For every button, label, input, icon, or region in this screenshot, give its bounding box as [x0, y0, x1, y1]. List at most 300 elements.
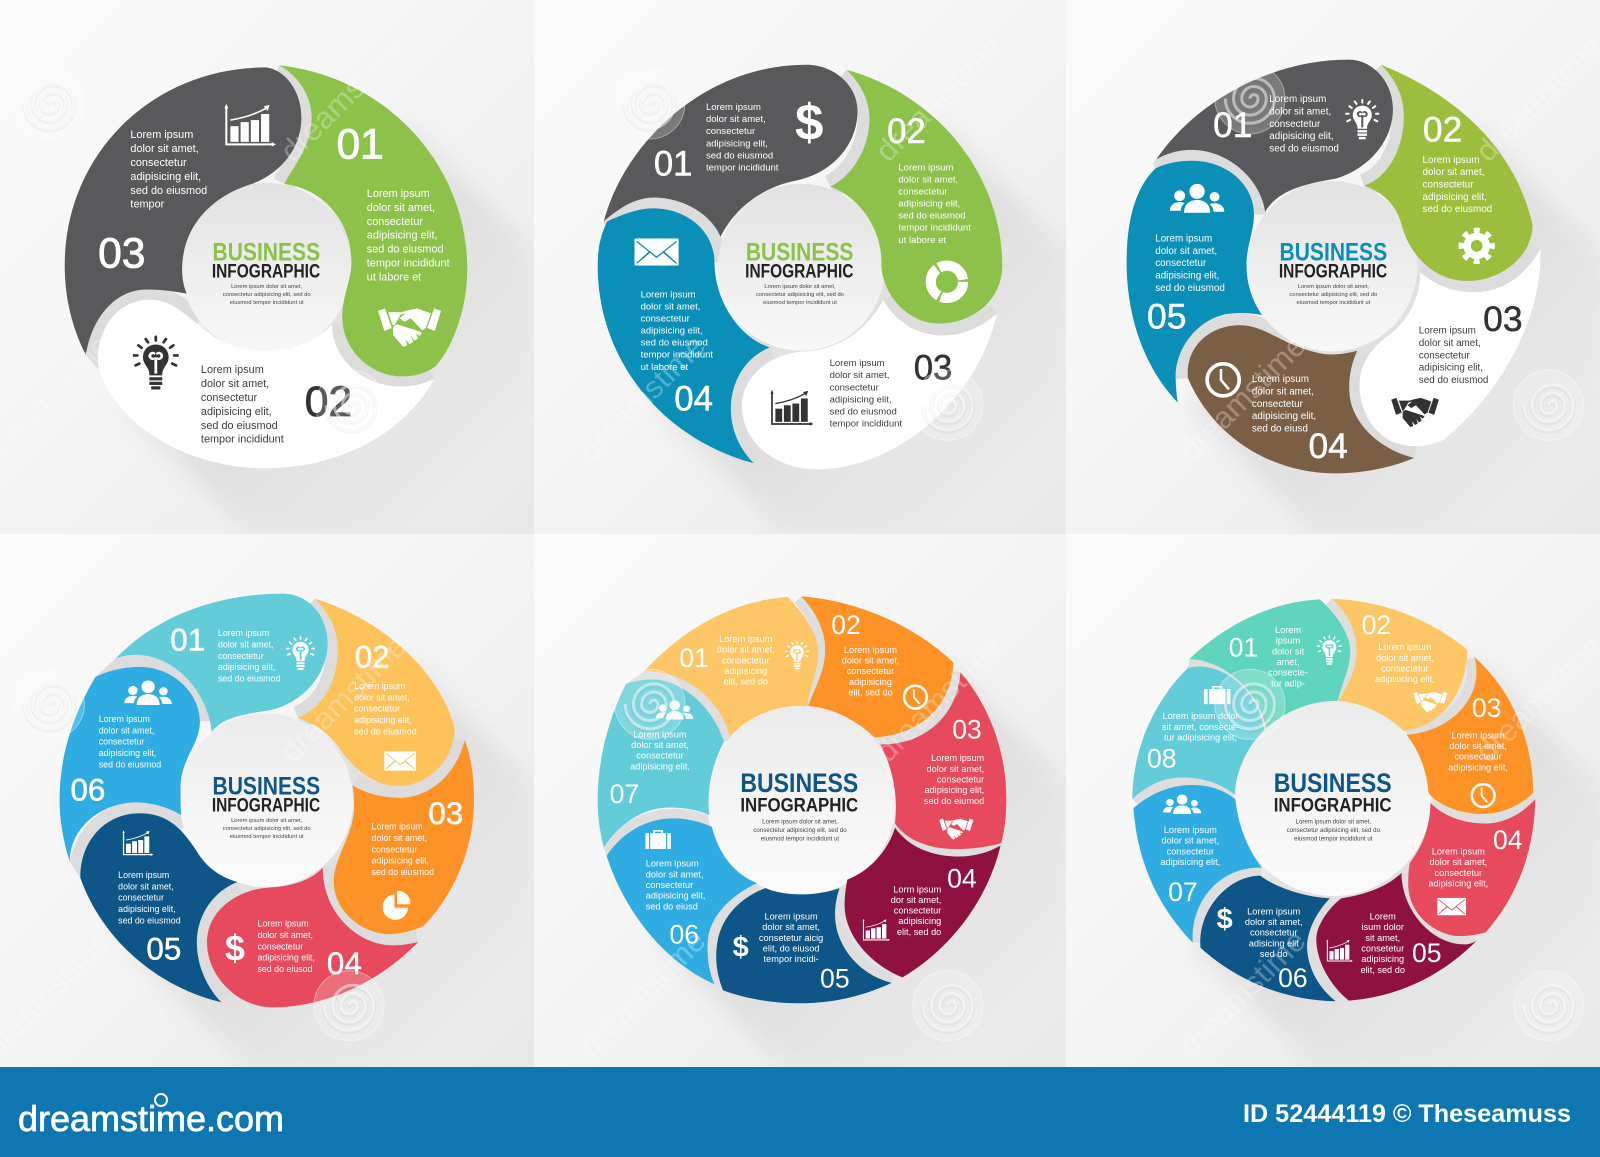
- text block: tempor incididunt: [830, 419, 902, 430]
- center circle: [181, 183, 351, 353]
- icon: clock: [904, 686, 927, 709]
- number 06: 06: [1278, 963, 1308, 993]
- text block: sed do: [1260, 949, 1288, 959]
- number 02: 02: [1362, 610, 1391, 640]
- center title: BUSINESS: [1274, 768, 1392, 798]
- text block: dolor sit amet,: [257, 930, 313, 940]
- center title: Lorem ipsum dolor sit amet,: [1296, 818, 1371, 825]
- text block: tempor: [130, 199, 165, 211]
- panel: 7-step diagram: [573, 596, 1066, 1067]
- text block: elit, sed do: [897, 927, 941, 937]
- text block: consectetur: [1419, 350, 1471, 361]
- segment 07: cyan: [598, 679, 724, 847]
- center circle: [707, 706, 896, 895]
- text block: dolor sit amet,: [372, 833, 427, 843]
- text block: tempor incididunt: [898, 223, 971, 234]
- text block: isum dolor: [1362, 922, 1404, 932]
- icon: dollar: $: [795, 94, 823, 151]
- text block: adipisicing elit,: [218, 662, 275, 672]
- watermark: [0, 29, 413, 468]
- text block: dolor sit amet,: [201, 378, 269, 390]
- text block: adipisicing elit,: [1419, 363, 1483, 374]
- segment 01: green: [279, 65, 467, 376]
- number 06: 06: [670, 920, 699, 950]
- number 02: 02: [305, 378, 352, 426]
- text block: tempor incididunt: [706, 162, 779, 173]
- text block: dolor sit amet,: [1161, 836, 1219, 846]
- number 04: 04: [674, 380, 713, 418]
- text block: adipisicing elit,: [1269, 131, 1333, 142]
- segment 05: navy: [80, 813, 237, 1002]
- watermark: dreamstime: [869, 629, 1009, 769]
- text block: sed do eiusd: [1252, 423, 1308, 434]
- segment 03: white: [742, 300, 997, 469]
- center title: [212, 240, 320, 306]
- text block: dolor sit amet,: [830, 370, 889, 381]
- center title: INFOGRAPHIC: [212, 796, 320, 817]
- number 01: 01: [170, 622, 205, 657]
- text block: tempor incididunt: [641, 350, 713, 361]
- text block: ut labore et: [898, 235, 946, 246]
- text block: sed do eiusmod: [1155, 283, 1225, 294]
- icon: bulb: [134, 337, 178, 389]
- icon: envelope: [1437, 898, 1466, 915]
- center title: eiusmod tempor incididunt ut: [230, 834, 304, 840]
- icon: chart: [1326, 939, 1353, 962]
- text block: tur adip-: [1271, 678, 1305, 688]
- text block: consectetur: [218, 651, 264, 661]
- segment 01: cyan: [116, 594, 328, 732]
- text block: Lorem ipsum: [201, 364, 264, 376]
- text block: sed do eiusd: [646, 901, 698, 911]
- text block: adipisicing elit,: [630, 761, 690, 771]
- text block: dolor sit: [1272, 646, 1305, 656]
- icon: envelope: [384, 751, 416, 771]
- text block: tempor incididunt: [201, 434, 284, 446]
- center title: BUSINESS: [213, 240, 320, 267]
- icon: briefcase: [645, 831, 671, 849]
- panel: 8-step diagram: [1066, 598, 1600, 1067]
- text block: ipsum: [1276, 636, 1301, 646]
- text block: Lorem ipsum: [1164, 825, 1217, 835]
- text block: Lorem ipsum: [830, 358, 885, 369]
- text block: ut labore et: [367, 272, 421, 284]
- center title: INFOGRAPHIC: [1274, 796, 1392, 817]
- text block: adisicing elit: [1249, 938, 1299, 948]
- text block: sed do eiusmod: [118, 915, 181, 925]
- segment 03: white: [1360, 249, 1540, 446]
- text block: adipisicing elit,: [1448, 762, 1508, 772]
- watermark: dreamstime: [869, 29, 1009, 168]
- icon: bulb: [785, 641, 809, 669]
- text block: consectetur: [646, 880, 693, 890]
- number 07: 07: [610, 779, 639, 809]
- text block: consectetur: [636, 751, 684, 761]
- text block: dolor sit amet,: [1419, 338, 1481, 349]
- text block: dolor sit amet,: [646, 869, 703, 879]
- watermark: dreamstime: [573, 924, 712, 1063]
- number 01: 01: [1229, 633, 1258, 663]
- segment 02: white: [98, 300, 434, 468]
- text block: sed do eiusmod: [641, 338, 708, 349]
- text block: adipisicing elit,: [641, 326, 702, 337]
- center title: consectetur adipisicing elit, sed do: [1287, 827, 1381, 834]
- segment 01: teal: [1189, 599, 1350, 728]
- text block: Lorem ipsum: [218, 628, 269, 638]
- text block: sed do eiusmod: [706, 150, 773, 161]
- text block: tur adipisicing elit,: [1164, 733, 1237, 743]
- segment 01: gray: [1156, 60, 1393, 212]
- text block: adipisicing elit,: [354, 715, 412, 725]
- number 03: 03: [98, 229, 145, 277]
- icon: dollar: $: [225, 928, 245, 968]
- number 02: 02: [1423, 109, 1462, 149]
- icon: users: [656, 700, 693, 720]
- segment 02: lime: [1364, 65, 1533, 281]
- text block: sit amet,: [1365, 933, 1400, 943]
- icon: bulb: [1317, 636, 1341, 665]
- text block: Lorem ipsum: [633, 729, 687, 739]
- segment 04: red: [207, 868, 418, 1007]
- text block: consectetur: [1167, 846, 1214, 856]
- logo spiral mark: [155, 1094, 167, 1106]
- center title: consectetur adipisicing elit, sed do: [1289, 292, 1377, 298]
- number 02: 02: [831, 610, 861, 640]
- watermark: [0, 629, 413, 1063]
- text block: Lorem ipsum: [118, 870, 169, 880]
- icon: dollar: $: [1217, 904, 1233, 936]
- number 01: 01: [654, 145, 693, 183]
- text block: dolor sit amet,: [631, 740, 689, 750]
- text block: Lorem ipsum: [646, 859, 699, 869]
- center circle: [179, 713, 353, 887]
- center title: Lorem ipsum dolor sit amet,: [231, 284, 303, 290]
- text block: Lorem ipsum: [765, 912, 818, 922]
- center circle: [718, 184, 885, 351]
- text block: consectetur: [372, 844, 417, 854]
- center title: consectetur adipisicing elit, sed do: [223, 826, 311, 832]
- watermark: dreamstime: [274, 629, 413, 769]
- icon: chart: [122, 830, 153, 856]
- text block: sed do eiusmod: [1419, 375, 1488, 386]
- text block: adipisicing elit,: [257, 953, 315, 963]
- text block: Lorem ipsum: [99, 714, 150, 724]
- text block: Lorem ipsum: [130, 129, 193, 141]
- text block: dor sit amet,: [891, 895, 941, 905]
- icon: handshake: [378, 308, 441, 347]
- watermark: dreamstime: [1173, 924, 1313, 1063]
- text block: consectetur: [937, 774, 984, 784]
- icon: users: [1170, 184, 1224, 213]
- text block: consectetur: [118, 893, 164, 903]
- center title: eiusmod tempor incididunt ut: [763, 300, 837, 306]
- number 01: 01: [1213, 105, 1253, 145]
- text block: consectetur: [257, 941, 303, 951]
- text block: consectetur: [1381, 663, 1429, 673]
- text block: dolor sit amet,: [354, 692, 410, 702]
- segment 04: blue: [598, 208, 770, 463]
- icon: handshake: [939, 819, 973, 839]
- text block: Lorm ipsum: [893, 884, 942, 894]
- segment 01: gray: [604, 65, 858, 237]
- text block: adipisicing elit,: [201, 406, 272, 418]
- text block: adipisicing elit,: [924, 785, 984, 795]
- center title: [1279, 240, 1387, 306]
- text block: sed do eiusmod: [218, 674, 280, 684]
- text block: sed do eiusmod: [367, 244, 444, 256]
- center title: consectetur adipisicing elit, sed do: [756, 292, 844, 298]
- text block: dolor sit amet,: [898, 174, 958, 185]
- text block: dolor sit amet,: [1449, 741, 1507, 751]
- number 04: 04: [947, 864, 977, 894]
- text block: dolor sit amet,: [118, 881, 174, 891]
- segment 03: orange: [1407, 657, 1533, 814]
- text block: sed do eiusod: [257, 964, 313, 974]
- center title: INFOGRAPHIC: [212, 262, 320, 283]
- text block: consectetur: [201, 392, 258, 404]
- text block: adipisicing: [1361, 954, 1404, 964]
- text block: consectetur: [1252, 399, 1304, 410]
- panel: 6-step diagram: [0, 594, 534, 1067]
- long shadow: [124, 124, 534, 534]
- text block: Lorem ipsum: [1378, 642, 1432, 652]
- center title: [745, 240, 854, 306]
- icon: bulb: [1346, 100, 1379, 139]
- text block: tempor incididunt: [367, 258, 450, 270]
- text block: sed do eiusmod: [372, 867, 434, 877]
- text block: consectetur: [1269, 119, 1321, 130]
- center circle: [1235, 700, 1431, 896]
- text block: Lorem ipsum: [931, 753, 985, 763]
- text block: consectetur: [99, 737, 145, 747]
- text block: Lorem ipsum: [719, 634, 773, 644]
- text block: sed do eiusmod: [99, 759, 161, 769]
- number 07: 07: [1168, 877, 1198, 907]
- icon: handshake: [1413, 692, 1447, 712]
- text block: adipisicing: [724, 666, 767, 676]
- text block: consectetur: [1423, 179, 1474, 190]
- text block: sed do eiusmod: [354, 726, 417, 736]
- watermark: dreamstime: [1173, 328, 1313, 468]
- icon: pie chart: [383, 891, 410, 920]
- text block: sed do eiusmod: [1269, 143, 1339, 154]
- segment 03: orange: [334, 740, 474, 934]
- text block: sed do eiusmod: [898, 211, 966, 222]
- panel: 5-step diagram: [1066, 29, 1600, 534]
- number 05: 05: [146, 932, 181, 967]
- text block: adipisicing elit,: [1160, 857, 1220, 867]
- text block: consectetur: [894, 906, 941, 916]
- icon: briefcase: [1204, 687, 1230, 704]
- footer banner: [0, 1067, 1600, 1157]
- text block: dolor sit amet,: [1376, 653, 1434, 663]
- segment 05: maroon: [1316, 873, 1476, 1001]
- segment 03: gray: [65, 67, 301, 355]
- segment 03: red: [880, 672, 1006, 849]
- text block: consectetur: [1250, 928, 1297, 938]
- text block: adipisicing elit,: [646, 891, 705, 901]
- text block: dolor sit amet,: [1269, 106, 1331, 117]
- text block: adipisicing elit,: [99, 748, 156, 758]
- text block: sed do eiumod: [924, 796, 984, 806]
- segment 04: maroon: [845, 828, 1001, 977]
- text block: sed do eiusmod: [130, 185, 207, 197]
- text block: dolor sit amet,: [927, 764, 984, 774]
- center title: Lorem ipsum dolor sit amet,: [762, 818, 838, 825]
- text block: consectetur: [367, 216, 423, 228]
- text block: elit, sed do: [724, 677, 768, 687]
- segment 02: green: [830, 70, 1002, 324]
- text block: adipisicing: [849, 677, 892, 687]
- number 04: 04: [1308, 426, 1348, 466]
- icon: clock: [1207, 364, 1239, 396]
- text block: adipisicing: [898, 916, 941, 926]
- center title: BUSINESS: [740, 768, 858, 798]
- number 03: 03: [1472, 693, 1501, 723]
- text block: dolor sit amet,: [99, 725, 154, 735]
- text block: dolor sit amet,: [1423, 167, 1484, 178]
- text block: adipisicing elit,: [130, 171, 201, 183]
- text block: adipisicing elit,: [1428, 878, 1488, 888]
- center title: INFOGRAPHIC: [745, 262, 854, 283]
- text block: consectetur: [847, 666, 894, 676]
- text block: Lorem ipsum: [1419, 326, 1476, 337]
- text block: sed do eiusmod: [830, 406, 897, 417]
- icon: envelope: [634, 238, 679, 266]
- text block: elit, do eiusod: [763, 943, 819, 953]
- text block: amet,: [1277, 657, 1300, 667]
- icon: gear: [1461, 230, 1492, 261]
- segment 07: blue: [1133, 785, 1262, 943]
- watermark: dreamstime: [573, 328, 712, 468]
- text block: sed do eiusmod: [1423, 204, 1492, 215]
- number 04: 04: [327, 946, 362, 981]
- text block: dolor sit amet,: [367, 202, 435, 214]
- text block: Lorem ipsum: [372, 822, 423, 832]
- icon: handshake: [1391, 398, 1439, 427]
- center title: [1274, 768, 1392, 843]
- center title: INFOGRAPHIC: [740, 796, 858, 817]
- center title: [740, 768, 858, 843]
- long shadow: [1190, 658, 1600, 1068]
- segment 08: cyan: [1132, 667, 1265, 799]
- segment 06: navy: [1200, 876, 1336, 1001]
- number 03: 03: [914, 350, 952, 388]
- icon: clock: [1472, 784, 1495, 807]
- center title: Lorem ipsum dolor sit amet,: [764, 284, 836, 290]
- footer logo: dreamstime.com: [18, 1098, 284, 1139]
- number 01: 01: [336, 120, 384, 168]
- long shadow: [124, 658, 534, 1068]
- watermark: dreamstime: [274, 29, 413, 168]
- text block: Lorem ipsum: [641, 289, 696, 300]
- center title: eiusmod tempor incididunt ut: [761, 836, 839, 843]
- long shadow: [658, 124, 1068, 534]
- panel: 4-step diagram: [573, 29, 1066, 534]
- text block: adipisicing elit,: [1252, 411, 1316, 422]
- number 02: 02: [887, 113, 926, 151]
- icon: chart: [224, 104, 276, 146]
- watermark: [1173, 29, 1600, 468]
- segment 06: blue: [60, 667, 200, 862]
- watermark: [573, 29, 1009, 468]
- center title: consectetur adipisicing elit, sed do: [223, 292, 311, 298]
- panel: 3-step diagram: [0, 29, 534, 534]
- icon: cycle: [931, 266, 963, 298]
- center title: Lorem ipsum dolor sit amet,: [1298, 284, 1369, 290]
- center title: INFOGRAPHIC: [1279, 262, 1387, 283]
- text block: adipisicing elit,: [898, 199, 960, 210]
- icon: users: [124, 680, 172, 705]
- text block: Lorem ipsum: [1247, 906, 1301, 916]
- text block: consectetur: [1435, 868, 1482, 878]
- image id and credit: ID 52444119 © Theseamuss: [1243, 1100, 1571, 1128]
- text block: Lorem ipsum: [1269, 94, 1326, 105]
- number 03: 03: [952, 714, 982, 744]
- segment 02: orange: [801, 596, 954, 737]
- segment 04: brown: [1188, 325, 1414, 473]
- center title: Lorem ipsum dolor sit amet,: [231, 818, 303, 824]
- text block: adipisicing elit,: [830, 394, 891, 405]
- text block: dolor sit amet,: [1429, 857, 1487, 867]
- number 05: 05: [1147, 297, 1186, 337]
- number 03: 03: [1483, 299, 1523, 339]
- text block: dolor sit amet,: [706, 114, 766, 125]
- text block: Lorem ipsum: [1452, 730, 1505, 740]
- number 06: 06: [70, 772, 105, 807]
- text block: Lorem ipsum: [706, 102, 761, 113]
- text block: Lorem: [1275, 625, 1301, 635]
- center title: BUSINESS: [213, 774, 320, 801]
- long shadow: [658, 658, 1068, 1068]
- number 01: 01: [679, 643, 709, 673]
- number 02: 02: [355, 640, 390, 675]
- text block: Lorem ipsum: [1432, 846, 1485, 856]
- segment 06: blue: [607, 818, 757, 984]
- segment 05: blue: [1127, 161, 1262, 403]
- text block: dolor sit amet,: [762, 922, 820, 932]
- text block: adipisicing elit,: [1375, 674, 1435, 684]
- text block: Lorem ipsum dolor: [1162, 711, 1239, 721]
- segment 01: yellow: [645, 597, 818, 737]
- text block: ut labore et: [641, 362, 689, 373]
- text block: Lorem: [1370, 912, 1396, 922]
- text block: adipisicing elit,: [118, 904, 176, 914]
- number 03: 03: [428, 796, 463, 831]
- watermark: [573, 629, 1009, 1063]
- text block: tempor incidi-: [764, 954, 819, 964]
- center title: consectetur adipisicing elit, sed do: [753, 827, 847, 834]
- icon: dollar: $: [733, 931, 749, 963]
- center title: BUSINESS: [746, 240, 853, 267]
- text block: sed do eiusmod: [201, 420, 278, 432]
- icon: bulb: [287, 637, 314, 670]
- number 08: 08: [1147, 744, 1177, 774]
- text block: adipisicing elit,: [372, 856, 429, 866]
- center circle: [1247, 181, 1417, 351]
- text block: elit, sed do: [1361, 965, 1405, 975]
- watermark: [1173, 629, 1600, 1063]
- text block: adipisicing elit,: [1423, 192, 1487, 203]
- text block: consetetur: [1361, 943, 1404, 953]
- text block: adipisicing elit,: [367, 230, 438, 242]
- icon: chart: [862, 919, 890, 941]
- segment 05: navy: [716, 888, 892, 1003]
- text block: Lorem ipsum: [367, 188, 430, 200]
- text block: elit, sed do: [848, 687, 893, 697]
- center title: eiusmod tempor incididunt ut: [1294, 836, 1373, 843]
- text block: adipisicing elit,: [706, 138, 768, 149]
